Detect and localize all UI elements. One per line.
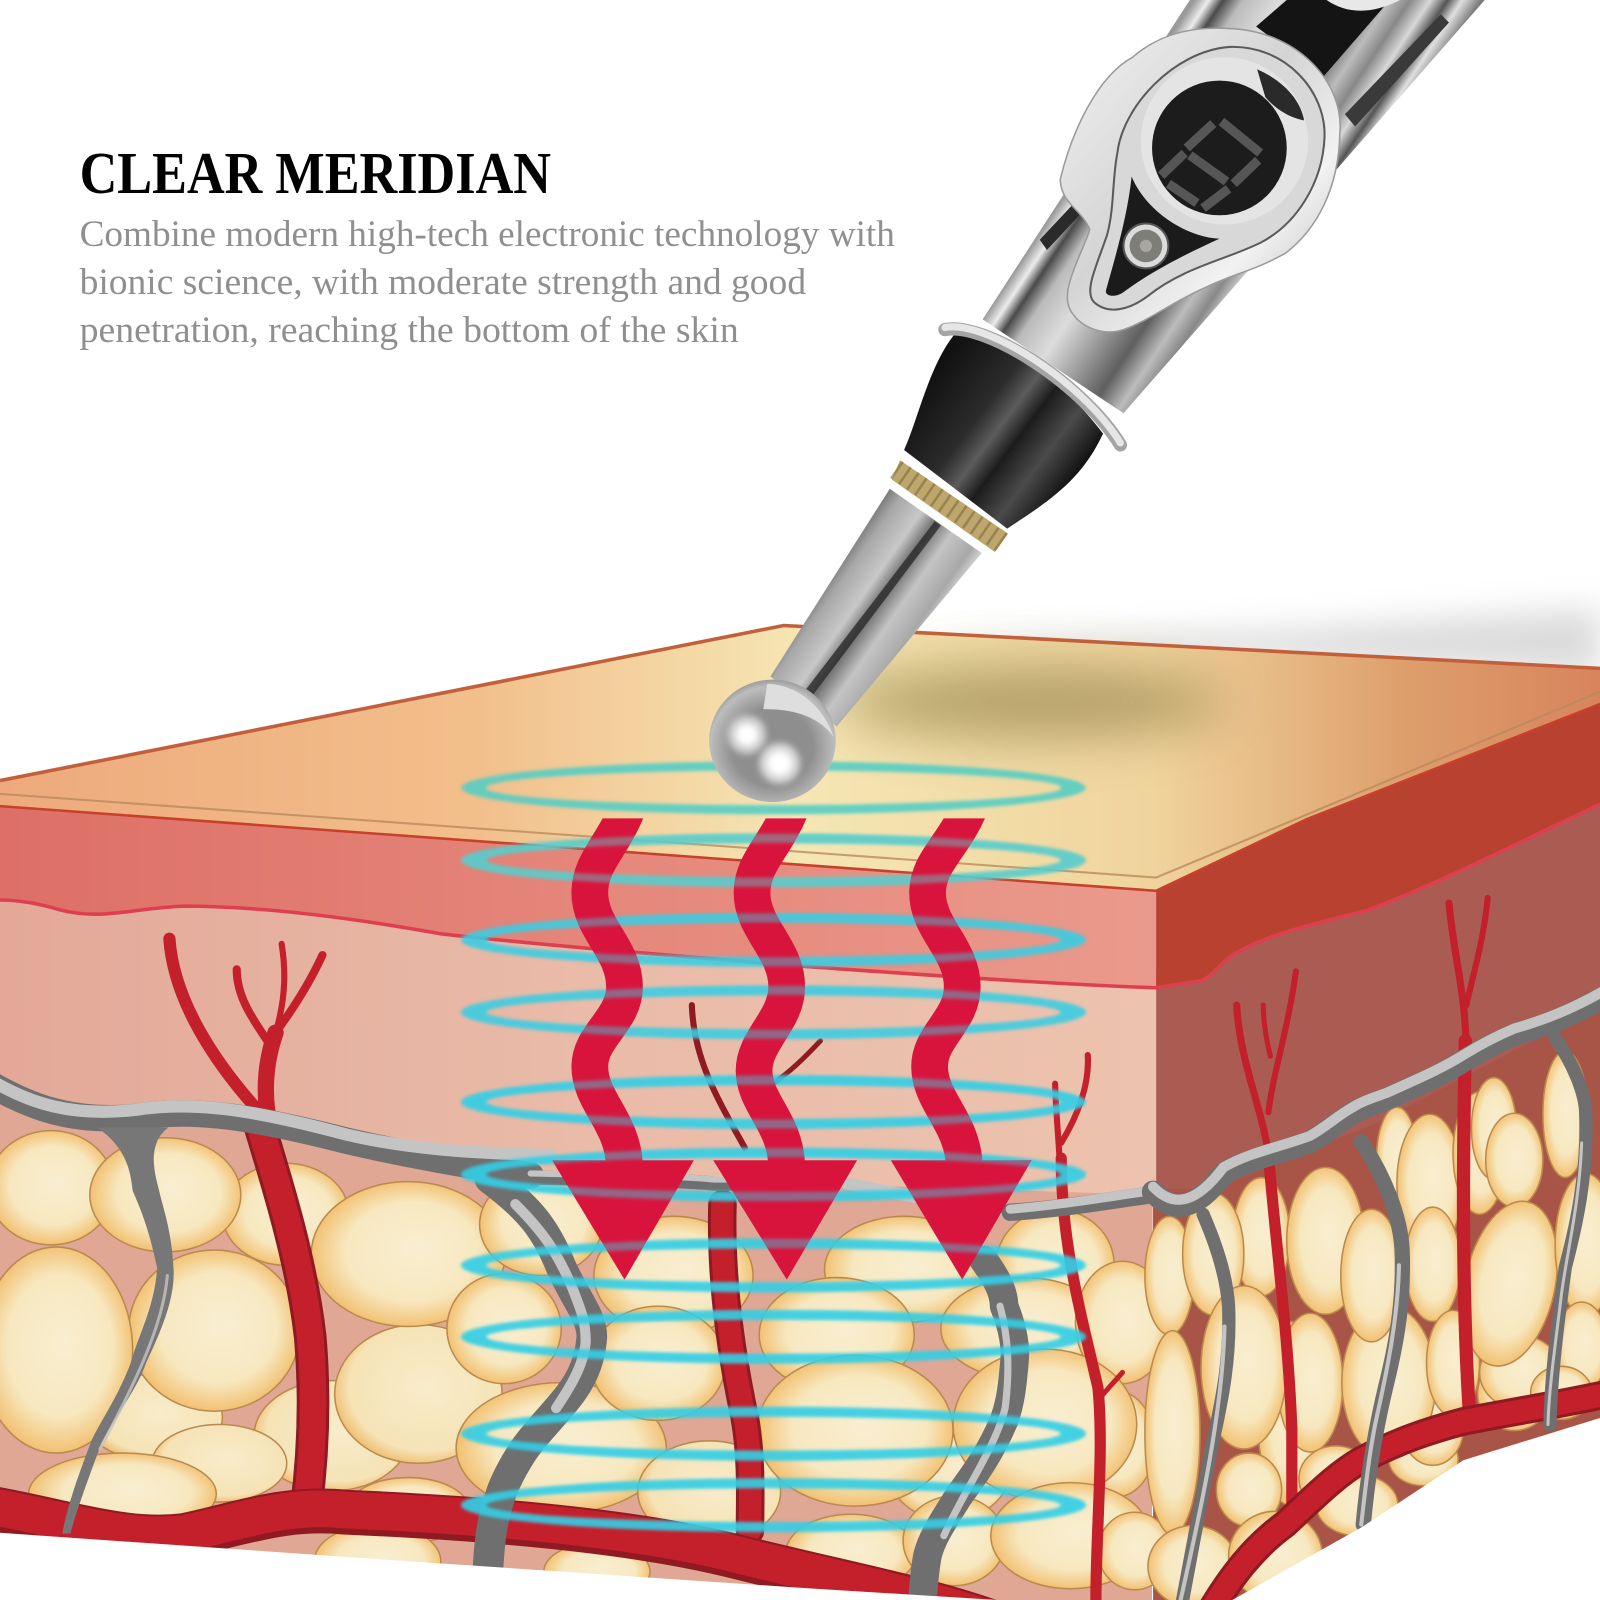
chrome ring [945,327,1120,445]
description [80,213,895,350]
digital display [1152,81,1287,215]
dermis front face [0,888,1156,1327]
branch strand two [486,1179,592,1600]
connective tissue strands [0,992,1600,1600]
right face vessels [1237,898,1488,1520]
dark right stripe [1345,14,1449,127]
centre vessel [692,1005,820,1531]
indicator light [1123,223,1168,268]
teardrop inner trim [1090,47,1325,310]
black tapered collar [904,335,1103,529]
text block [80,140,895,350]
pen body [983,0,1485,413]
red wavy arrows [552,808,1032,1280]
right face branches [1181,1038,1586,1600]
dermis right face [1156,786,1600,1327]
description: penetration, reaching the bottom of the skin [80,309,739,350]
top front edge line [0,704,1600,891]
arrow three [891,808,1032,1280]
white cut-away right [1229,1417,1600,1600]
seven segment digit [1161,121,1260,208]
description: bionic science, with moderate strength and good [80,261,806,302]
epidermis right face [1156,704,1600,988]
bezel dark reflection [1257,69,1304,120]
skin cross-section block [0,626,1600,1327]
description: Combine modern high-tech electronic technology with [80,213,895,254]
blood vessels [0,898,1600,1600]
fat background front [0,1082,1152,1600]
dark body stripe [1040,193,1090,250]
brass knurl [892,460,1008,552]
top skin surface [0,626,1600,891]
epidermis front face [0,806,1156,988]
electronic acupuncture pen [709,0,1485,802]
arrow one [552,808,694,1280]
branch strand three [922,1260,1015,1600]
upper black window [1256,0,1390,77]
left vessel tree [169,939,322,1508]
silver teardrop housing [1060,28,1340,332]
energy rings over arrows [461,834,1086,1532]
fat background right [1153,1005,1600,1600]
title: CLEAR MERIDIAN [80,140,551,206]
main front strand [0,1080,1158,1212]
energy rings under arrows [461,761,1086,1532]
right front vessel [1055,1055,1122,1600]
dark inset triangle [1106,177,1219,296]
epidermis lower edge [0,804,1600,988]
upper silver trim [1327,0,1400,11]
white cut-away left [0,1533,1031,1600]
branch strand one [62,1128,174,1534]
metal shaft [770,489,982,727]
right face main strand [1153,992,1600,1206]
shaft dark groove [804,521,941,696]
fat cells right [1145,1051,1600,1600]
ball tip [709,680,836,802]
fat layer [0,1005,1600,1600]
arrow two [713,808,857,1280]
bottom main vessel [0,1393,1600,1600]
fat cells front [0,1131,1171,1600]
soft shadow behind skin block [918,608,1600,673]
display bezel [1141,57,1308,224]
